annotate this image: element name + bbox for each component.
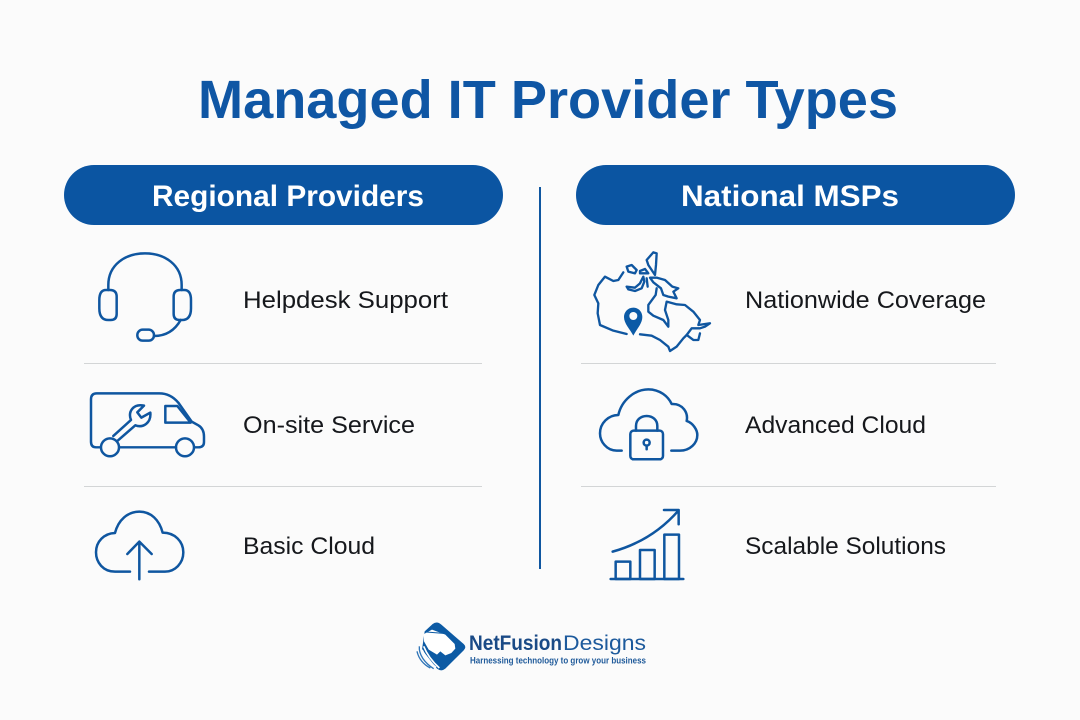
title: Managed IT Provider Types xyxy=(198,70,898,130)
label: nationwide coverage: Nationwide Coverage xyxy=(745,287,986,314)
icon: growth bar chart xyxy=(611,510,683,579)
label: scalable solutions: Scalable Solutions xyxy=(745,533,946,560)
icon: cloud upload xyxy=(96,512,183,579)
wordmark: NetFusion xyxy=(469,632,562,655)
heading: regional providers xyxy=(64,165,503,225)
label: basic cloud: Basic Cloud xyxy=(243,533,375,560)
label: advanced cloud: Advanced Cloud xyxy=(745,412,926,439)
label: on-site service: On-site Service xyxy=(243,412,415,439)
icon: cloud with padlock xyxy=(600,389,697,459)
icon: service van with wrench xyxy=(91,393,204,456)
heading: national msps xyxy=(576,165,1015,225)
tagline: Harnessing technology to grow your business xyxy=(470,656,646,666)
icon: headset xyxy=(99,253,191,341)
panel: national msps xyxy=(576,165,1015,579)
label: helpdesk support: Helpdesk Support xyxy=(243,287,448,314)
center divider xyxy=(539,187,541,569)
logo: netfusion designs: Designs xyxy=(563,632,646,655)
panel: regional providers xyxy=(64,165,503,579)
icon: lion badge xyxy=(417,622,465,670)
heading: national msps: National MSPs xyxy=(681,180,899,213)
heading: regional providers: Regional Providers xyxy=(152,180,424,213)
logo: netfusion designs xyxy=(417,622,646,670)
icon: canada map with pin xyxy=(594,252,710,351)
